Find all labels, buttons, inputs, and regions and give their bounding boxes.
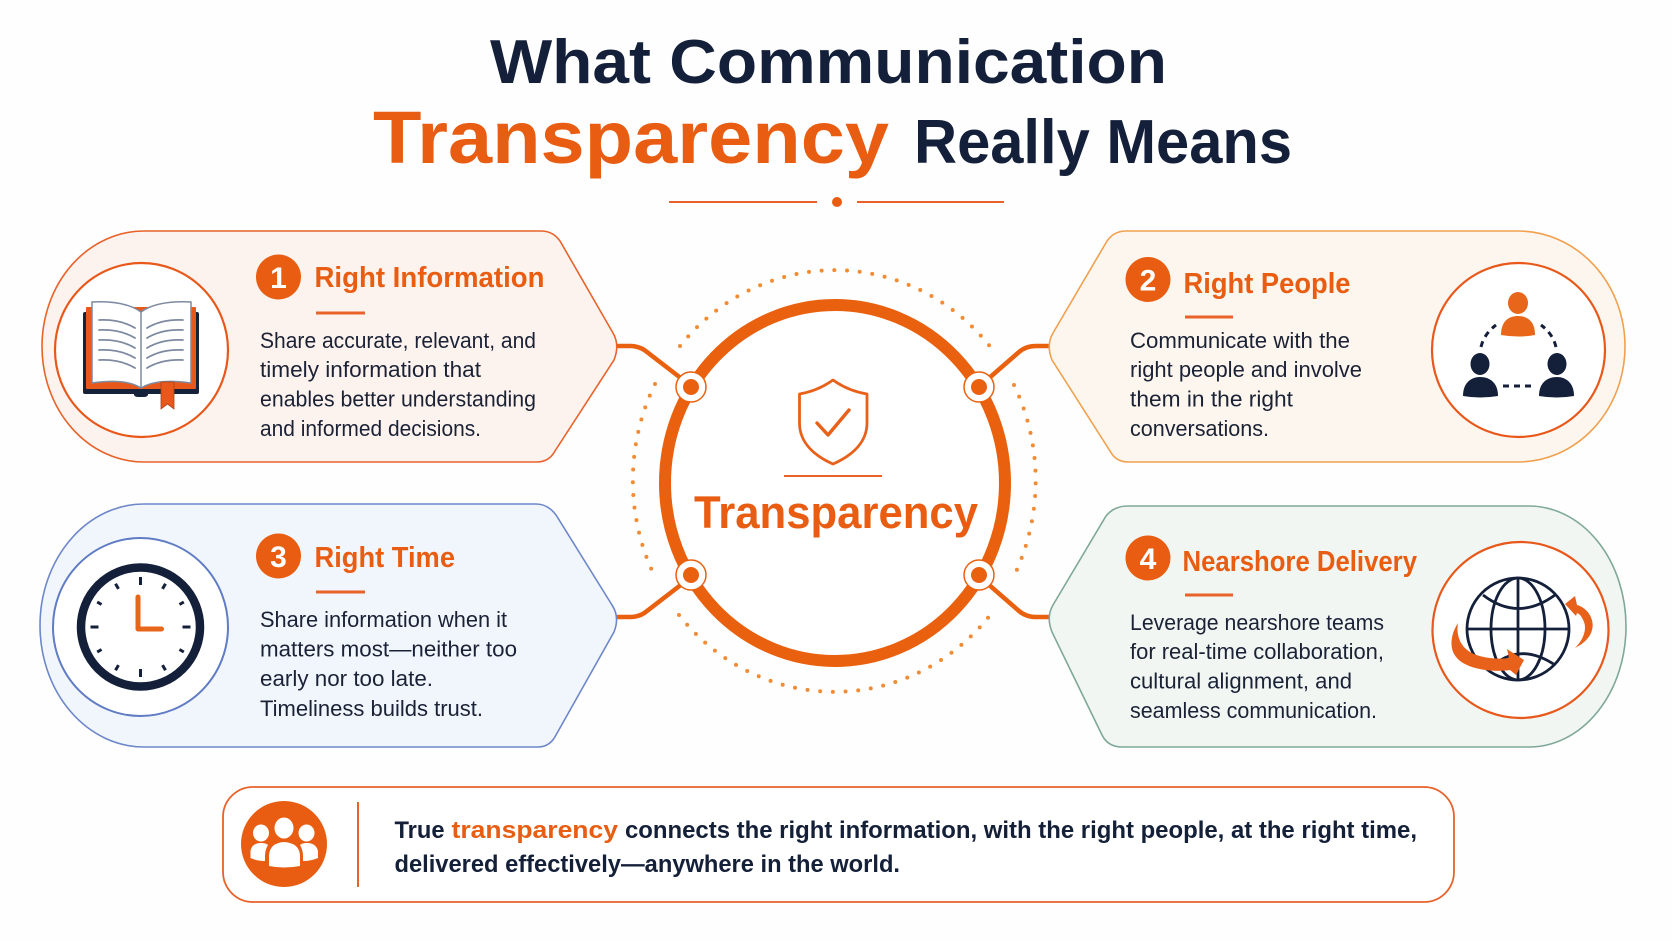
body text: and informed decisions. bbox=[260, 416, 481, 441]
body text: Share accurate, relevant, and bbox=[260, 328, 536, 353]
icon: team bbox=[241, 801, 327, 887]
body text: enables better understanding bbox=[260, 386, 536, 412]
dotted outer ring bbox=[633, 270, 1036, 692]
body text: early nor too late. bbox=[260, 666, 433, 691]
hub divider bbox=[784, 475, 882, 477]
callout: bottom summary bbox=[223, 787, 1454, 902]
icon: shield with check bbox=[800, 380, 867, 464]
body text: timely information that bbox=[260, 357, 481, 382]
body text: matters most—neither too bbox=[260, 636, 517, 662]
number badge 2: 2 bbox=[1140, 264, 1156, 298]
title: What Communication bbox=[490, 28, 1167, 97]
title bbox=[373, 28, 1292, 179]
heading underline bbox=[1185, 594, 1233, 596]
body text: Timeliness builds trust. bbox=[260, 696, 483, 721]
body text: Share information when it bbox=[260, 607, 507, 632]
connectors from panels to central ring bbox=[618, 346, 1048, 617]
central transparency hub bbox=[633, 270, 1036, 692]
heading: right information: Right Information bbox=[314, 262, 544, 294]
panel: right people bbox=[1049, 231, 1625, 462]
number badge 3: 3 bbox=[270, 541, 287, 574]
heading underline bbox=[316, 590, 365, 594]
body text: them in the right bbox=[1130, 386, 1293, 412]
body text: right people and involve bbox=[1130, 357, 1362, 382]
number badge 4: 4 bbox=[1140, 543, 1157, 576]
main ring bbox=[665, 305, 1005, 661]
number badge 1 bbox=[256, 254, 301, 300]
body text bbox=[260, 607, 517, 721]
body text bbox=[1130, 610, 1384, 723]
connector nodes bbox=[676, 372, 994, 590]
body text: Leverage nearshore teams bbox=[1130, 610, 1384, 635]
summary text bbox=[394, 817, 1417, 878]
callout divider bbox=[357, 802, 359, 887]
body text: seamless communication. bbox=[1130, 698, 1377, 723]
body text: conversations. bbox=[1130, 416, 1269, 441]
icon: connected people bbox=[1432, 263, 1605, 437]
summary text: connects the right information, with the right people, at the right time, bbox=[625, 817, 1417, 844]
summary text: transparency bbox=[452, 817, 619, 844]
heading underline bbox=[1185, 316, 1233, 318]
icon: clock bbox=[53, 538, 228, 716]
body text: cultural alignment, and bbox=[1130, 668, 1352, 694]
heading underline bbox=[316, 312, 365, 314]
summary text: True bbox=[394, 817, 444, 844]
title: Transparency bbox=[373, 96, 889, 179]
body text bbox=[260, 328, 536, 441]
body text: for real-time collaboration, bbox=[1130, 639, 1384, 664]
icon: globe with arrows bbox=[1432, 542, 1608, 718]
summary text: delivered effectively—anywhere in the world. bbox=[394, 851, 900, 878]
number badge 3 bbox=[256, 534, 301, 578]
heading: right people: Right People bbox=[1184, 268, 1350, 300]
number badge 4 bbox=[1126, 536, 1170, 580]
hub label: Transparency bbox=[694, 487, 978, 538]
number badge 2 bbox=[1126, 257, 1170, 302]
panel: right information bbox=[42, 231, 617, 462]
body text: Communicate with the bbox=[1130, 328, 1350, 353]
heading: nearshore delivery: Nearshore Delivery bbox=[1182, 546, 1417, 578]
heading: right time: Right Time bbox=[314, 542, 455, 574]
title divider bbox=[669, 197, 1004, 207]
title: Really Means bbox=[914, 108, 1292, 177]
panel: right time bbox=[40, 504, 617, 747]
number badge 1: 1 bbox=[270, 262, 287, 295]
icon: open book bbox=[55, 263, 228, 437]
body text bbox=[1130, 328, 1362, 441]
panel: nearshore delivery bbox=[1049, 506, 1626, 747]
